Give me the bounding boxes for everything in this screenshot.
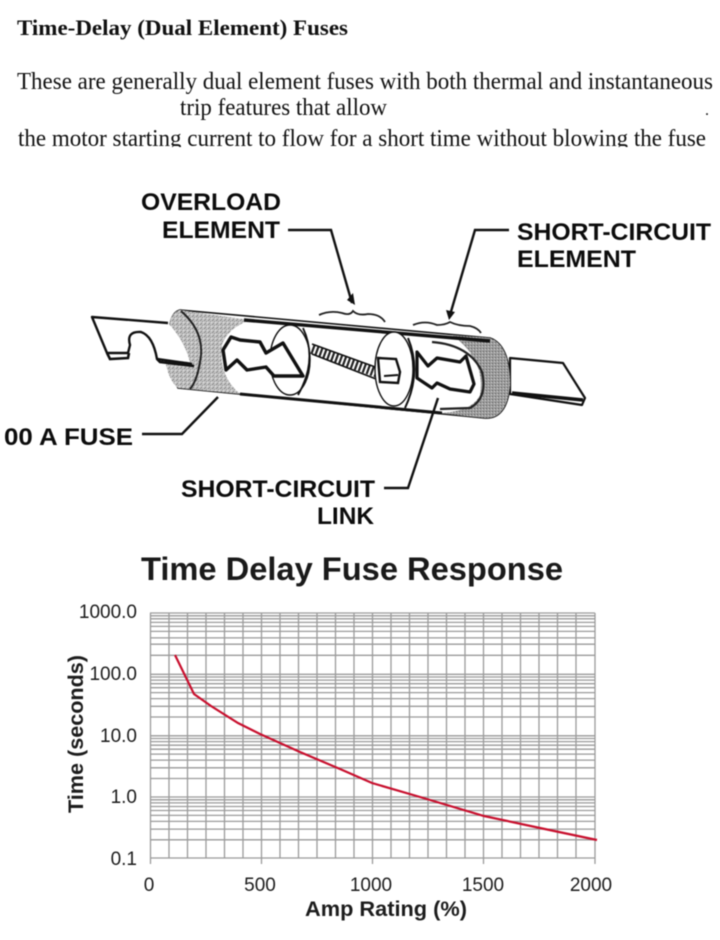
left blade terminal [92, 317, 190, 362]
y axis labels [79, 602, 137, 870]
intro text block: trip features that allow [180, 95, 388, 121]
intro text block: . [705, 102, 709, 119]
label: short-circuit element [446, 219, 711, 320]
braces above elements [319, 311, 385, 322]
intro text block: the motor starting current to flow for a short time without blowing the fuse [18, 126, 706, 152]
y axis labels: 0.1 [111, 849, 137, 870]
label: 600 A fuse: 00 A FUSE [4, 424, 133, 451]
y axis labels: 10.0 [100, 726, 137, 747]
line chart [65, 602, 612, 921]
x axis labels: 500 [244, 875, 276, 896]
label: short-circuit element: ELEMENT [517, 246, 636, 273]
barrel window bottom edge [240, 394, 442, 413]
left overload link [223, 337, 303, 376]
speckled end cap left [166, 310, 250, 394]
right blade terminal [510, 358, 585, 405]
y axis title: Time (seconds) [65, 655, 88, 813]
spring end plug [378, 358, 400, 383]
y axis labels: 100.0 [89, 664, 137, 685]
label: 600 A fuse [4, 397, 218, 451]
gridlines [150, 613, 595, 864]
chart title: Time Delay Fuse Response [141, 551, 563, 587]
speckled end cap right [438, 335, 510, 418]
x axis title: Amp Rating (%) [305, 898, 467, 921]
fuse diagram [92, 310, 585, 418]
right short-circuit link [417, 352, 474, 392]
y axis labels: 1000.0 [79, 602, 137, 623]
y axis labels: 1.0 [111, 787, 137, 808]
label: overload element [141, 189, 355, 305]
label: short-circuit element: SHORT-CIRCUIT [517, 219, 711, 246]
x axis labels: 1000 [350, 875, 392, 896]
inner sleeve curve [432, 342, 484, 409]
x axis labels: 2000 [570, 875, 612, 896]
x axis labels: 0 [144, 875, 154, 896]
label: short-circuit link: SHORT-CIRCUIT [181, 476, 375, 503]
label: short-circuit link [181, 398, 438, 530]
response curve [175, 655, 597, 840]
label: overload element: ELEMENT [162, 217, 280, 244]
right disc [375, 332, 413, 406]
title: Time-Delay (Dual Element) Fuses [17, 15, 348, 40]
barrel window top edge [244, 320, 490, 341]
fuse barrel [170, 310, 510, 418]
x axis labels [144, 875, 612, 896]
left disc [270, 325, 310, 395]
label: short-circuit link: LINK [317, 503, 375, 530]
label: overload element: OVERLOAD [141, 189, 281, 216]
x axis labels: 1500 [462, 875, 504, 896]
intro text block [17, 69, 713, 152]
spring coil [312, 349, 378, 373]
